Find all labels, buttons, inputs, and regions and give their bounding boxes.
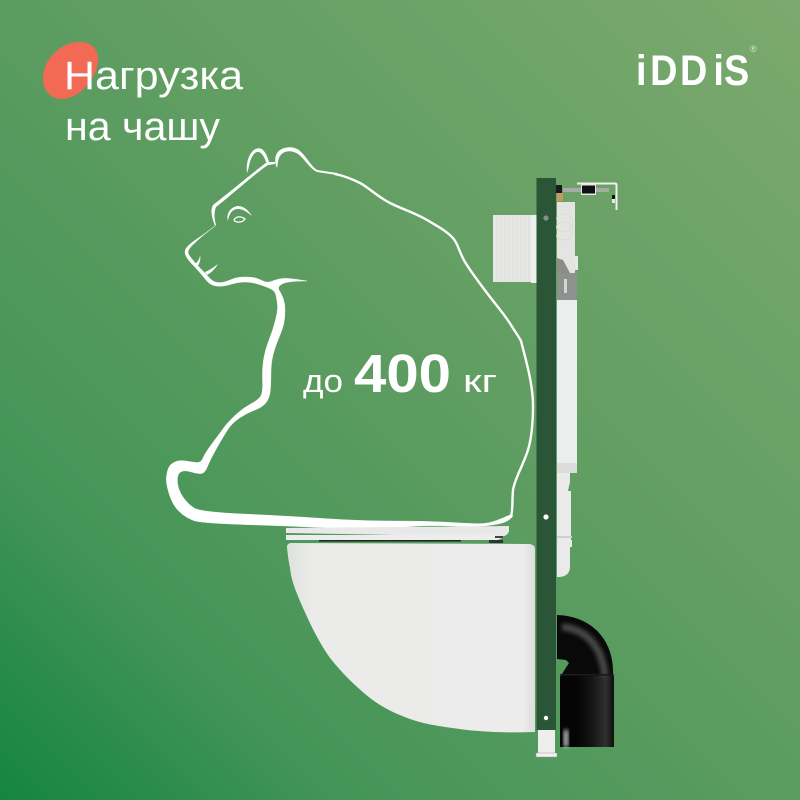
toilet bowl bbox=[287, 543, 535, 732]
drain pipe bbox=[557, 473, 572, 577]
toilet seat bbox=[286, 526, 509, 543]
air duct panel bbox=[493, 215, 537, 283]
bear: left ear bbox=[247, 148, 269, 173]
bear: forehead bbox=[212, 162, 275, 226]
load label: до bbox=[303, 363, 343, 399]
logo: IDDIS: iDDiS bbox=[636, 46, 749, 95]
bear: chest, neck, muzzle and seated base bbox=[166, 226, 513, 529]
bear: mouth line bbox=[205, 264, 218, 275]
bear: back line bbox=[335, 174, 533, 516]
frame foot bbox=[536, 728, 557, 757]
load label: кг bbox=[463, 363, 497, 399]
title: на чашу bbox=[65, 105, 220, 149]
logo: IDDIS: ® bbox=[750, 44, 757, 54]
coral blob accent bbox=[43, 42, 98, 99]
installation frame assembly bbox=[286, 178, 616, 757]
cistern bbox=[555, 202, 578, 473]
title bbox=[64, 54, 244, 149]
title: Нагрузка bbox=[64, 54, 244, 98]
green steel frame bbox=[536, 178, 556, 730]
bear: nose line bbox=[194, 255, 200, 268]
bear outline bbox=[166, 147, 533, 529]
black outlet elbow bbox=[557, 615, 614, 747]
bear: brow bbox=[227, 206, 252, 221]
load label: 400 bbox=[354, 344, 451, 404]
load label bbox=[303, 344, 497, 404]
flush pipe and bracket bbox=[556, 184, 616, 210]
bear: eye bbox=[234, 217, 245, 222]
bear: right ear bbox=[275, 147, 337, 175]
